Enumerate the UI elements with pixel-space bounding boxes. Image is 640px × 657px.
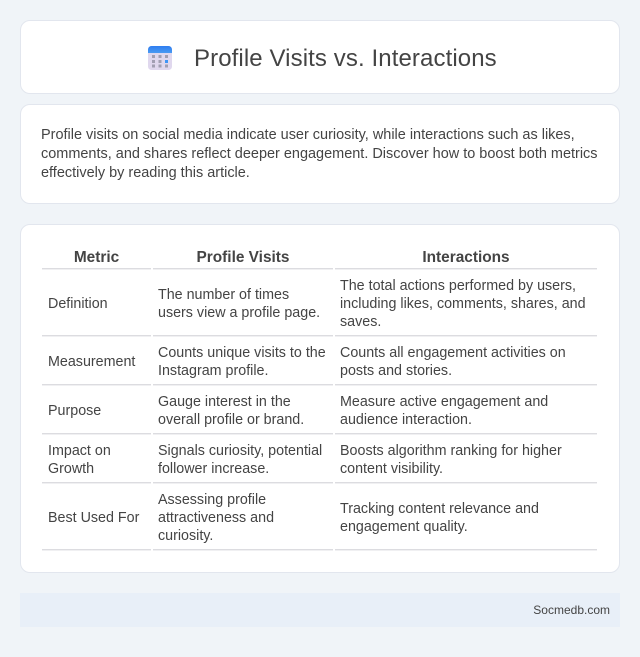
row: purpose: audience interaction.	[340, 412, 472, 428]
row: definition: The total actions performed by users,	[340, 278, 576, 294]
table	[42, 249, 597, 551]
row: best used for: Best Used For	[48, 510, 139, 526]
footer bar	[20, 593, 620, 627]
row: impact on growth: Boosts algorithm ranking for higher	[340, 443, 562, 459]
row: definition: saves.	[340, 314, 381, 330]
row: measurement	[48, 345, 566, 379]
intro text	[41, 127, 598, 181]
row: best used for	[48, 492, 539, 544]
row: impact on growth: follower increase.	[158, 461, 269, 477]
row: measurement: Counts all engagement activities on	[340, 345, 566, 361]
row: best used for: Assessing profile	[158, 492, 266, 508]
icon: calendar	[148, 46, 172, 70]
row: best used for: attractiveness and	[158, 510, 274, 526]
row: impact on growth: Growth	[48, 461, 94, 477]
intro text: Profile visits on social media indicate user curiosity, while interactions such as likes,	[41, 127, 575, 143]
header row	[74, 249, 510, 266]
row: impact on growth	[48, 443, 562, 477]
row: definition: users view a profile page.	[158, 305, 320, 321]
row: measurement: Measurement	[48, 354, 135, 370]
row: impact on growth: Signals curiosity, potential	[158, 443, 322, 459]
panel: introduction	[20, 104, 620, 204]
row: purpose: Measure active engagement and	[340, 394, 548, 410]
header row: Profile Visits	[197, 249, 289, 266]
intro text: effectively by reading this article.	[41, 165, 250, 181]
row: purpose: overall profile or brand.	[158, 412, 304, 428]
footer source text: Socmedb.com	[533, 603, 610, 617]
row: best used for: Tracking content relevance and	[340, 501, 539, 517]
row: definition	[48, 278, 586, 330]
row: best used for: engagement quality.	[340, 519, 468, 535]
row: purpose: Purpose	[48, 403, 101, 419]
row: measurement: Instagram profile.	[158, 363, 268, 379]
header row: Interactions	[422, 249, 510, 266]
row: purpose	[48, 394, 548, 428]
row: measurement: posts and stories.	[340, 363, 452, 379]
panel: comparison table	[20, 224, 620, 573]
intro text: comments, and shares reflect deeper engagement. Discover how to boost both metrics	[41, 146, 598, 162]
row: purpose: Gauge interest in the	[158, 394, 291, 410]
row: best used for: curiosity.	[158, 528, 213, 544]
row: definition: including likes, comments, shares, and	[340, 296, 586, 312]
row: definition: The number of times	[158, 287, 289, 303]
row: impact on growth: Impact on	[48, 443, 111, 459]
panel: title card	[20, 20, 620, 94]
header row: Metric	[74, 249, 119, 266]
row: measurement: Counts unique visits to the	[158, 345, 326, 361]
row: impact on growth: content visibility.	[340, 461, 443, 477]
title: Profile Visits vs. Interactions	[194, 45, 497, 72]
row: definition: Definition	[48, 296, 108, 312]
